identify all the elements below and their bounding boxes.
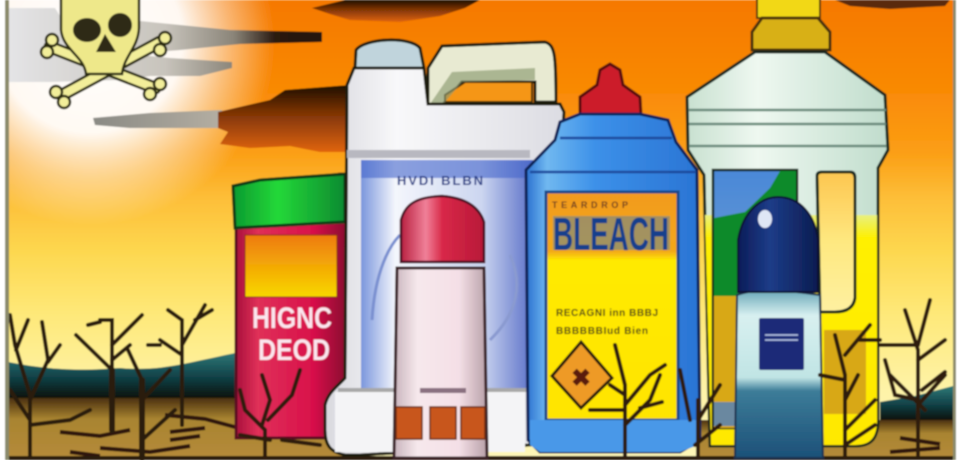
jar: Hignc Deod: DEOD: [258, 334, 330, 367]
deodorant body: [735, 290, 823, 458]
hazard diamond: ✖: [571, 365, 591, 392]
jug base: [335, 392, 525, 452]
green jar lid: [233, 174, 345, 228]
red nozzle cap: [580, 64, 641, 115]
label instructions: RECAGNI inn BBBJ: [556, 308, 658, 319]
bleach label: BBBBBBIud Bien: [556, 326, 648, 337]
orange warning squares: [396, 407, 485, 439]
jug handle: [428, 42, 556, 108]
navy deodorant label: [759, 318, 804, 370]
skull eye sockets and nose: [73, 13, 132, 52]
back trees on the left: [10, 305, 212, 458]
yellow liquid: [705, 215, 877, 445]
dark hills and cracked ground: [8, 352, 954, 460]
bottle shape: [526, 114, 700, 452]
red can cap: [401, 196, 484, 262]
roll-on deodorant: [735, 197, 823, 458]
can body: [394, 268, 487, 458]
bleach label: BLEACH: [553, 208, 669, 260]
hazard diamond: [552, 342, 612, 408]
storm cloud top right: [835, 0, 950, 9]
spray can: [394, 196, 487, 458]
can label rule: [420, 388, 466, 393]
foreground dead trees: [240, 300, 945, 458]
blue jug label: [361, 160, 533, 388]
bottle base: [530, 420, 698, 452]
jug label text: HVDI BLBN: [397, 173, 483, 188]
jug neck cap: [355, 40, 424, 68]
orange jar label: [245, 235, 337, 297]
clear bottle with yellow liquid: [687, 0, 888, 446]
navy cap: [738, 197, 818, 292]
bleach label: [546, 192, 678, 420]
bottle window: [713, 170, 797, 428]
yellow cap: [757, 0, 820, 18]
jug body: [325, 68, 564, 455]
blue bleach bottle: [526, 64, 700, 452]
label small text: TEARDROP: [552, 200, 628, 210]
icon: skull and crossbones: [41, 0, 171, 108]
bottle body: [687, 52, 888, 446]
jar: Hignc Deod: [233, 174, 346, 438]
jar label text: HIGNC: [252, 302, 332, 335]
cap collar: [752, 18, 830, 50]
handle hole: [817, 172, 855, 312]
smoke clouds behind skull: [8, 8, 322, 82]
storm cloud top centre: [312, 0, 480, 22]
grey cloud streak: [93, 110, 222, 128]
BLEACH wordmark: [553, 216, 670, 250]
storm cloud left of jug: [218, 85, 350, 152]
white jug: [325, 40, 564, 455]
